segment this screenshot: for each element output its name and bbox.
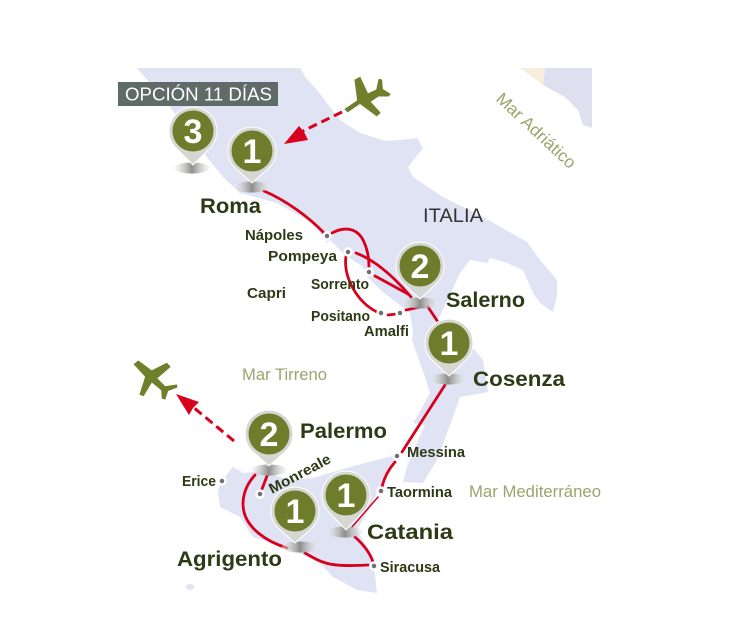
stop: Messina	[394, 452, 400, 460]
stop: Siracusa	[370, 562, 378, 570]
stop: Positano	[378, 310, 384, 316]
route: Messina to Taormina	[382, 462, 395, 487]
land: northern neighbour	[520, 68, 545, 85]
route: Salerno to Cosenza	[428, 307, 438, 322]
label: Cosenza: Cosenza	[473, 367, 566, 391]
label: Capri: Capri	[247, 286, 286, 302]
label: Italia: ITALIA	[423, 205, 483, 227]
label: Erice: Erice	[182, 474, 216, 490]
label: Messina: Messina	[407, 445, 466, 461]
banner: trip option: OPCIÓN 11 DÍAS	[125, 84, 272, 104]
pin: Cosenza: 1	[440, 325, 458, 363]
label: Agrigento: Agrigento	[177, 547, 282, 571]
pin: Palermo	[245, 410, 293, 476]
label: Positano: Positano	[311, 309, 370, 325]
label: Roma: Roma	[200, 194, 262, 218]
pin: Roma 3 nights: 3	[184, 113, 202, 151]
land: small island	[186, 584, 194, 590]
label: Monreale: Monreale	[266, 451, 334, 498]
label: Pompeya: Pompeya	[268, 249, 338, 265]
route: Taormina to Catania	[352, 497, 378, 527]
land: Sicily	[218, 455, 397, 593]
pin: Salerno: 2	[411, 248, 429, 286]
label: Catania: Catania	[367, 520, 454, 544]
label: Salerno: Salerno	[446, 288, 525, 312]
route: Sorrento to Salerno	[375, 276, 408, 294]
pin: Catania: 1	[337, 477, 355, 515]
pin: Cosenza	[425, 319, 473, 384]
label: Mar Adriático: Mar Adriático	[492, 89, 580, 172]
pin: Roma 3 nights	[169, 107, 217, 174]
pin: Roma 1 night	[228, 127, 276, 192]
pin: Agrigento	[271, 487, 319, 552]
stop: Pompeya	[344, 248, 352, 256]
pin: Roma 1 night: 1	[243, 133, 261, 171]
stop markers	[218, 232, 404, 570]
route: Nápoles to Sorrento	[332, 229, 369, 270]
stop: Erice	[218, 478, 226, 484]
route: Cosenza to Messina	[402, 385, 445, 452]
route: Pompeya to Salerno	[356, 253, 411, 297]
label: Siracusa: Siracusa	[380, 560, 441, 576]
label: Taormina: Taormina	[387, 485, 453, 501]
route: Agrigento to Palermo	[243, 475, 287, 548]
label: Nápoles: Nápoles	[245, 228, 303, 244]
travel routes	[243, 191, 445, 566]
route: Amalfi to Salerno	[406, 307, 420, 310]
label: Mar Tirreno: Mar Tirreno	[242, 365, 327, 384]
land: Balkan coast	[543, 68, 592, 128]
pin: Catania	[322, 471, 370, 538]
stop: Taormina	[378, 488, 384, 494]
pin: Palermo: 2	[260, 416, 278, 454]
pin: Salerno	[396, 242, 444, 308]
stop: Sorrento	[366, 268, 372, 276]
route: Roma to Nápoles	[264, 191, 325, 234]
icon: arrival plane	[345, 77, 390, 116]
land: mainland Italy	[137, 68, 557, 483]
label: Sorrento: Sorrento	[311, 277, 369, 293]
pin: Agrigento: 1	[286, 493, 304, 531]
route: Pompeya to Positano	[346, 256, 377, 312]
stop: Amalfi	[396, 310, 404, 316]
route: Catania to Siracusa	[355, 537, 373, 562]
route: Palermo to Monreale	[262, 476, 267, 489]
route: Positano to Amalfi	[388, 314, 396, 315]
label: Palermo: Palermo	[300, 419, 387, 443]
route: Siracusa to Agrigento	[305, 553, 368, 566]
stop: Monreale	[256, 490, 264, 498]
map: land masses	[137, 68, 592, 593]
label: Amalfi: Amalfi	[364, 324, 409, 340]
label: Mar Mediterráneo: Mar Mediterráneo	[469, 482, 601, 501]
icon: departure plane	[134, 361, 177, 399]
stop: Nápoles	[324, 232, 330, 240]
arrow: departure flight	[176, 394, 234, 441]
arrow: arrival flight	[284, 112, 342, 144]
